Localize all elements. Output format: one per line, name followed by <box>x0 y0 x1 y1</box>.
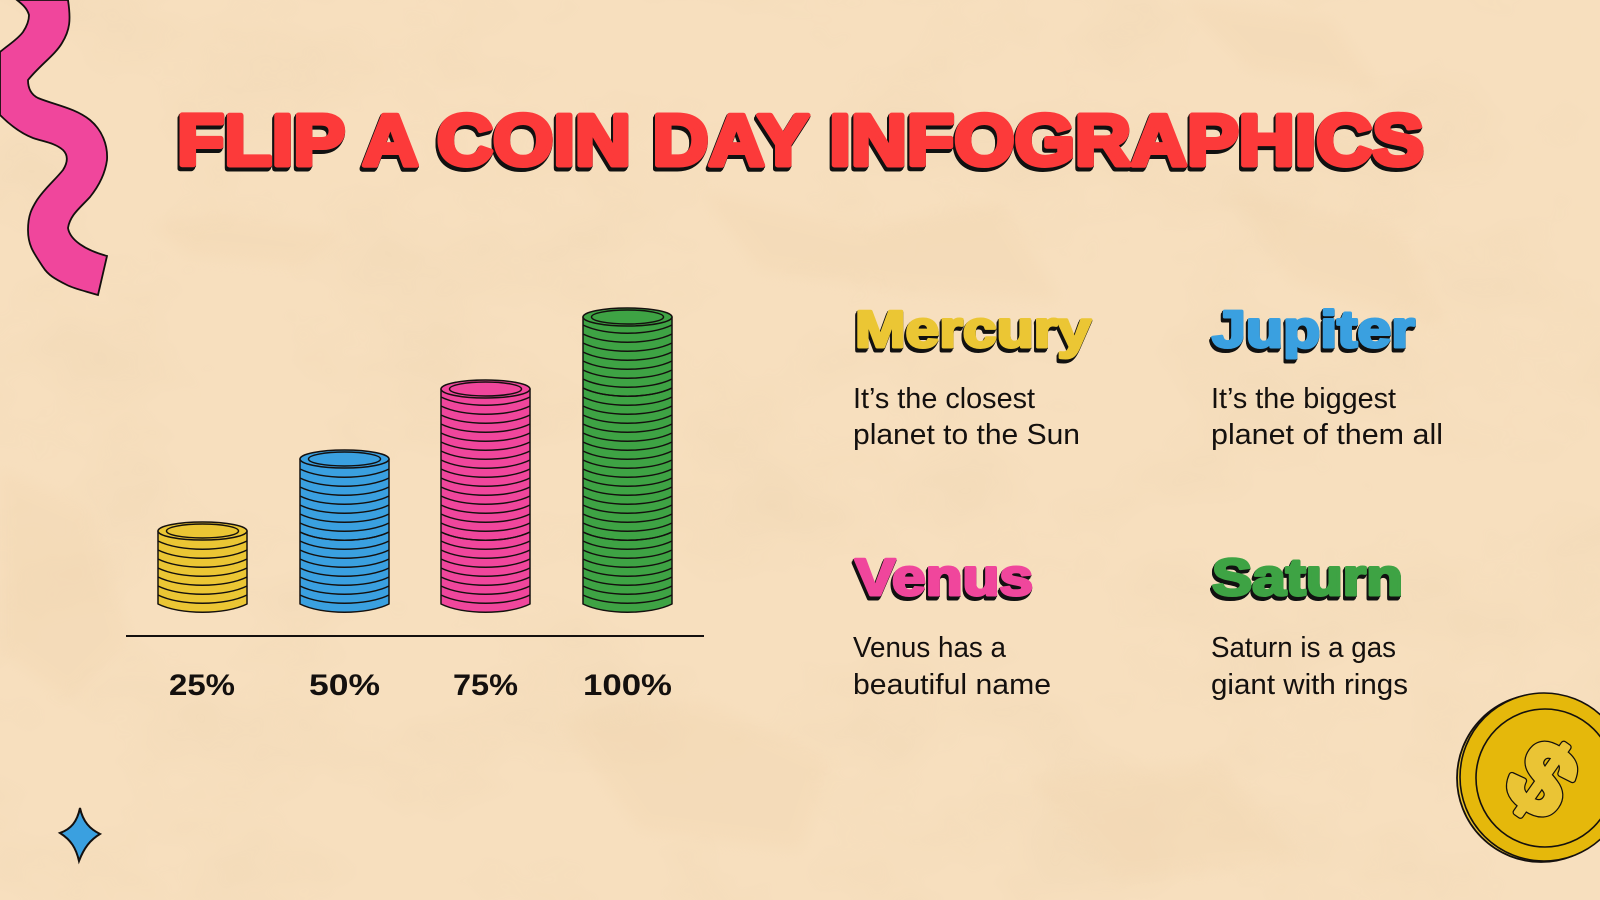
heading: Venus: Venus <box>855 549 1033 607</box>
label 75%: 75% <box>453 669 518 702</box>
description: Saturn: giant with rings <box>1211 669 1408 701</box>
description: Venus: Venus has a <box>853 632 1007 664</box>
label 25%: 25% <box>169 669 235 702</box>
coin stack: 50% blue <box>300 450 389 612</box>
description: Mercury: It’s the closest <box>853 383 1035 415</box>
coin stack: 75% pink <box>441 380 530 612</box>
block: Jupiter <box>1211 301 1443 451</box>
title: FLIP A COIN DAY INFOGRAPHICS <box>177 101 1424 181</box>
decorative pink wavy ribbon <box>0 0 107 295</box>
description: Mercury: planet to the Sun <box>853 419 1080 451</box>
description: Venus: beautiful name <box>853 669 1051 701</box>
icon: gold dollar coin: $ <box>1486 716 1598 842</box>
icon: blue four-point star <box>60 808 100 861</box>
description: Jupiter: planet of them all <box>1211 419 1443 451</box>
block: Mercury <box>853 301 1091 451</box>
block: Venus <box>853 549 1051 701</box>
coin stack: 25% yellow <box>158 522 247 612</box>
icon: gold dollar coin: $ <box>1486 716 1598 842</box>
label 100%: 100% <box>583 669 672 702</box>
heading: Jupiter: Jupiter <box>1212 301 1415 359</box>
description: Saturn: Saturn is a gas <box>1211 632 1396 664</box>
heading: Mercury: Mercury <box>855 301 1091 359</box>
chart: coin stacks <box>126 308 704 702</box>
icon: gold dollar coin <box>1457 693 1600 862</box>
coin stack: 100% green <box>583 308 672 612</box>
block: Saturn <box>1211 549 1408 701</box>
label 50%: 50% <box>309 669 380 702</box>
description: Jupiter: It’s the biggest <box>1211 383 1396 415</box>
heading: Saturn: Saturn <box>1212 549 1403 607</box>
